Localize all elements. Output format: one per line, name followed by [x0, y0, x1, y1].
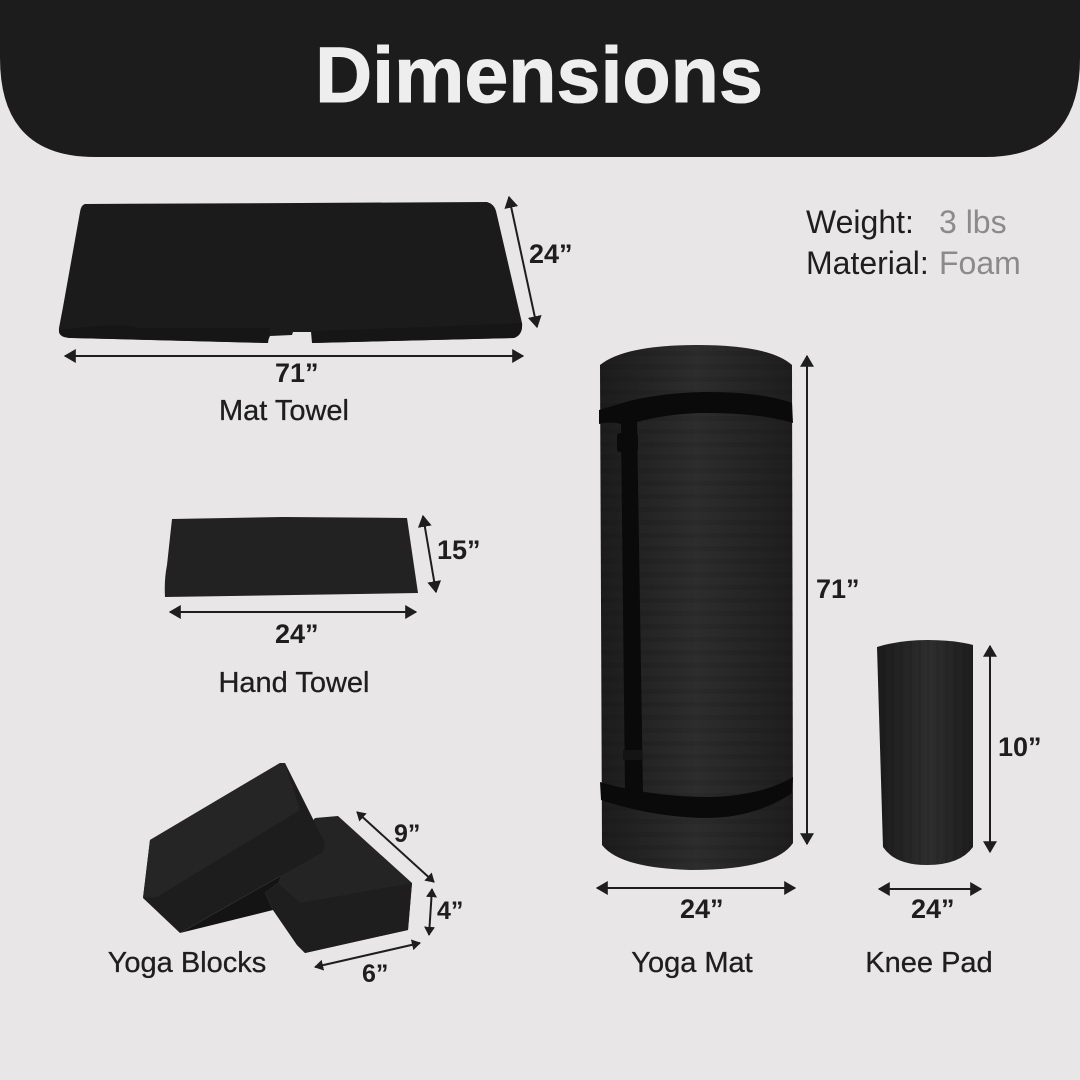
- text: weight and material: Material:: [806, 245, 929, 281]
- arrow: block length: [357, 812, 434, 882]
- arrow: block width: [315, 943, 420, 967]
- icon: yoga blocks: [143, 763, 412, 953]
- title: Dimensions: [315, 30, 763, 119]
- label: 71: 71”: [275, 358, 319, 388]
- label: 71: 71”: [816, 574, 860, 604]
- label: 24: 24”: [529, 239, 573, 269]
- icon: hand towel: [165, 517, 418, 597]
- icon: mat towel: [59, 202, 522, 343]
- arrow: knee pad width: [879, 888, 981, 890]
- arrow: hand towel depth: [423, 516, 436, 592]
- label: Knee Pad: Knee Pad: [865, 947, 993, 979]
- arrow: mat towel depth: [509, 197, 537, 327]
- arrow: hand towel width: [170, 611, 416, 613]
- icon: knee pad: [877, 640, 973, 865]
- label: 10: 10”: [998, 732, 1042, 762]
- label: Yoga Mat: Yoga Mat: [631, 947, 753, 979]
- label: 15: 15”: [437, 535, 481, 565]
- text: weight and material: 3 lbs: [939, 204, 1007, 240]
- label: 6: 6”: [362, 960, 388, 988]
- arrow: mat width: [597, 887, 795, 889]
- header banner: [0, 0, 1080, 157]
- arrow: knee pad height: [989, 646, 991, 852]
- arrow: mat towel width: [65, 355, 523, 357]
- icon: yoga mat: [599, 345, 793, 870]
- label: Mat Towel: Mat Towel: [219, 395, 349, 427]
- text: weight and material: Foam: [939, 245, 1021, 281]
- text: weight and material: [806, 204, 1021, 281]
- arrow: mat height: [806, 356, 808, 844]
- label: 24: 24”: [275, 619, 319, 649]
- label: Hand Towel: Hand Towel: [218, 667, 370, 699]
- label: 9: 9”: [394, 820, 420, 848]
- label: 24: 24”: [680, 894, 724, 924]
- label: 4: 4”: [437, 897, 463, 925]
- text: weight and material: Weight:: [806, 204, 914, 240]
- label: Yoga Blocks: Yoga Blocks: [108, 947, 266, 979]
- label: 24: 24”: [911, 894, 955, 924]
- arrow: block height: [429, 889, 432, 935]
